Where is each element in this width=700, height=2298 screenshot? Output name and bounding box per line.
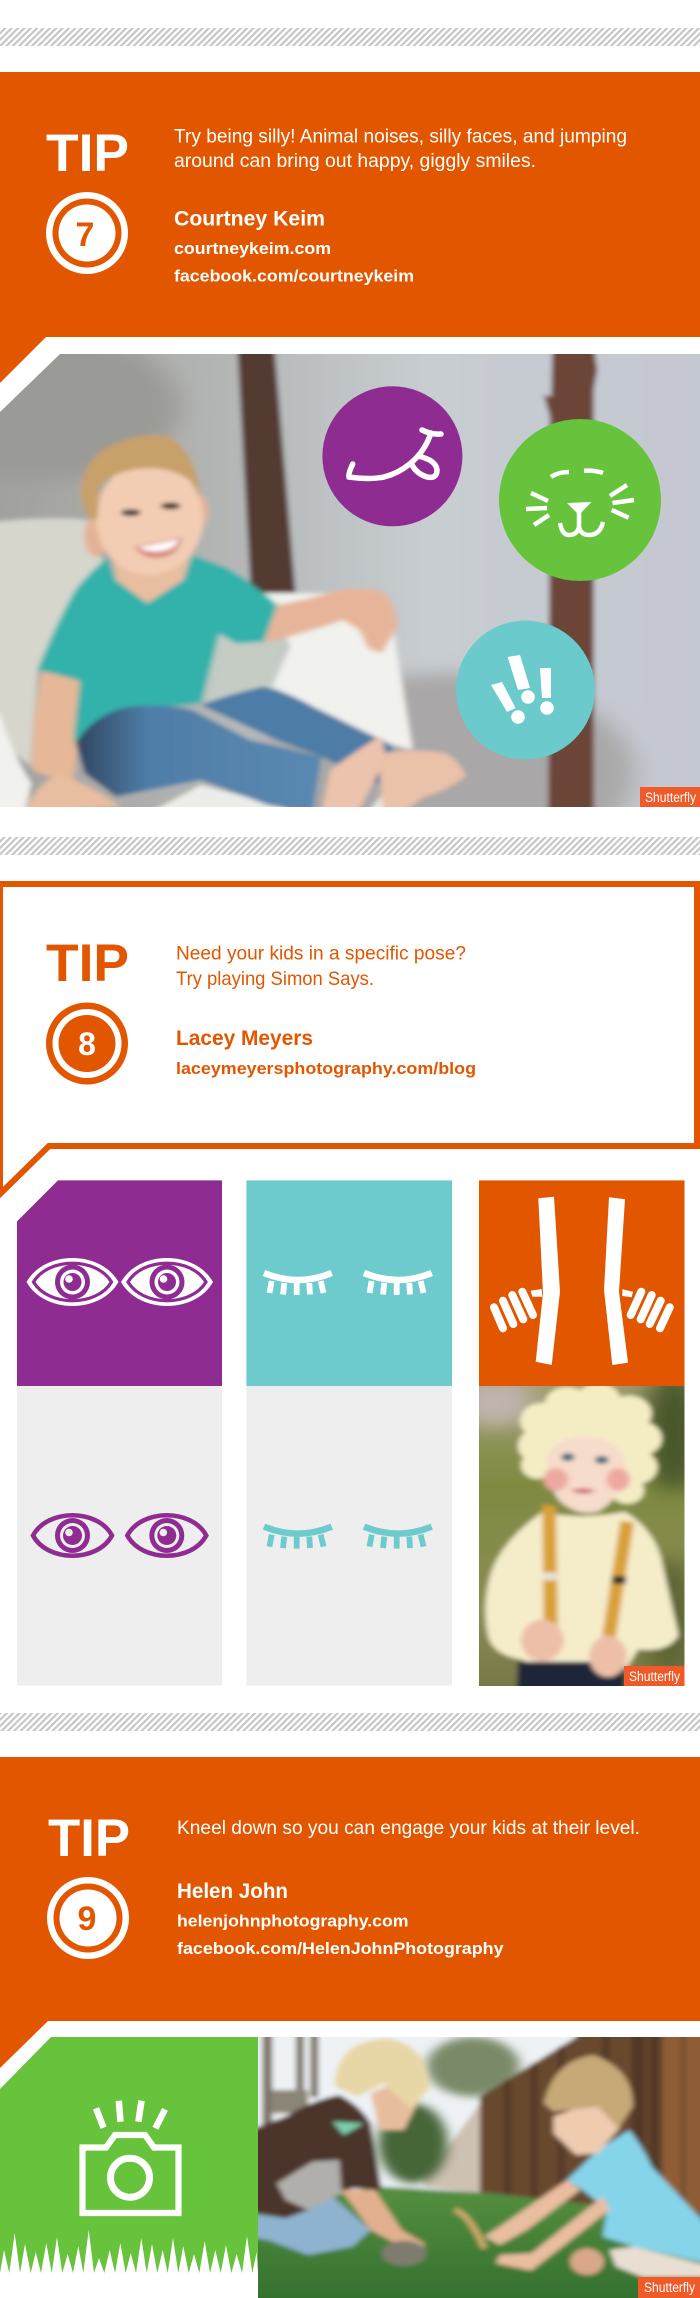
jeans (201, 687, 393, 787)
left boy (258, 2196, 374, 2258)
panel: tip 9 header (0, 1757, 700, 2068)
panel: suspenders pose (479, 1180, 684, 1386)
divider: hatched band lower (0, 1713, 700, 1731)
author credit: Helen John (177, 1880, 288, 1903)
badge: number 8: 8 (78, 1026, 96, 1062)
badge: number 8 (46, 1002, 128, 1084)
tip text: around can bring out happy, giggly smiles. (174, 150, 536, 172)
icon: white closed eyes (264, 1273, 432, 1295)
shirt (38, 555, 277, 743)
divider: hatched band top (0, 28, 700, 46)
suspenders (542, 1505, 558, 1635)
purple tile (17, 1180, 222, 1386)
tip text: Try being silly! Animal noises, silly faces, and jumping (174, 126, 627, 148)
trees (259, 2037, 322, 2128)
author credit: helenjohnphotography.com (177, 1912, 408, 1931)
photo: blond curly-haired child with suspenders (479, 1386, 684, 1686)
author credit: courtneykeim.com (174, 239, 331, 258)
icon: hands holding suspenders (494, 1197, 670, 1365)
green background (0, 2037, 258, 2298)
icon: white eyes (26, 1258, 213, 1306)
logo: Shutterfly badge photo 2 (624, 1666, 684, 1686)
logo: Shutterfly badge photo 3: Shutterfly (644, 2280, 695, 2295)
panel: tip 7 header (0, 72, 700, 383)
orange tile (479, 1180, 684, 1386)
tip text: Kneel down so you can engage your kids at their level. (177, 1817, 640, 1839)
teal tile (246, 1180, 452, 1386)
dinosaur (454, 2210, 484, 2248)
tip text: Need your kids in a specific pose? (176, 942, 466, 964)
heading: TIP: TIP (46, 934, 129, 993)
feet (321, 737, 385, 813)
grass (0, 2230, 258, 2298)
logo: Shutterfly badge photo 1 (640, 787, 700, 807)
logo: Shutterfly badge photo 2: Shutterfly (629, 1669, 680, 1684)
icon: teal circle with exclamation marks (456, 620, 595, 760)
photo: smiling boy on a white chair (0, 354, 700, 807)
outlined speech bubble (0, 884, 697, 1194)
hair and face (518, 1383, 662, 1504)
divider: hatched band middle (0, 837, 700, 855)
orange speech panel (0, 1757, 700, 2068)
heading: TIP: TIP (46, 124, 129, 183)
body (485, 1512, 679, 1674)
icon: teal closed eyes (264, 1527, 432, 1549)
icon: green circle with cat face (499, 419, 661, 581)
photo: two blond boys playing with toy dinosaurs on grass (258, 2037, 700, 2298)
author credit: Courtney Keim (174, 208, 325, 231)
lawn (223, 2187, 700, 2298)
grey tile (246, 1386, 452, 1686)
badge: number 9 (47, 1877, 129, 1959)
badge: number 9: 9 (78, 1900, 96, 1938)
badge: number 7: 7 (76, 216, 94, 254)
author credit: Lacey Meyers (176, 1027, 313, 1050)
grey tile (17, 1386, 222, 1686)
icon: camera with flash (82, 2101, 178, 2213)
badge: number 7 (46, 192, 128, 274)
panel: tip 8 header (0, 884, 697, 1194)
right boy (570, 2248, 604, 2275)
author credit: facebook.com/HelenJohnPhotography (177, 1939, 504, 1958)
tip text: Try playing Simon Says. (176, 968, 374, 990)
hands (521, 1620, 564, 1661)
panel: eyes open (17, 1180, 222, 1686)
author credit: laceymeyersphotography.com/blog (176, 1059, 476, 1078)
icon: purple eyes (33, 1515, 206, 1556)
heading: TIP: TIP (48, 1809, 130, 1868)
neck and face (112, 553, 192, 603)
panel: eyes closed (246, 1180, 452, 1686)
author credit: facebook.com/courtneykeim (174, 267, 414, 286)
icon: purple circle with tongue-out smile (322, 386, 462, 526)
orange speech panel (0, 72, 700, 383)
fence (424, 2103, 480, 2193)
arms (32, 668, 85, 782)
panel: green camera tile (0, 2037, 258, 2298)
logo: Shutterfly badge photo 3 (638, 2277, 700, 2298)
